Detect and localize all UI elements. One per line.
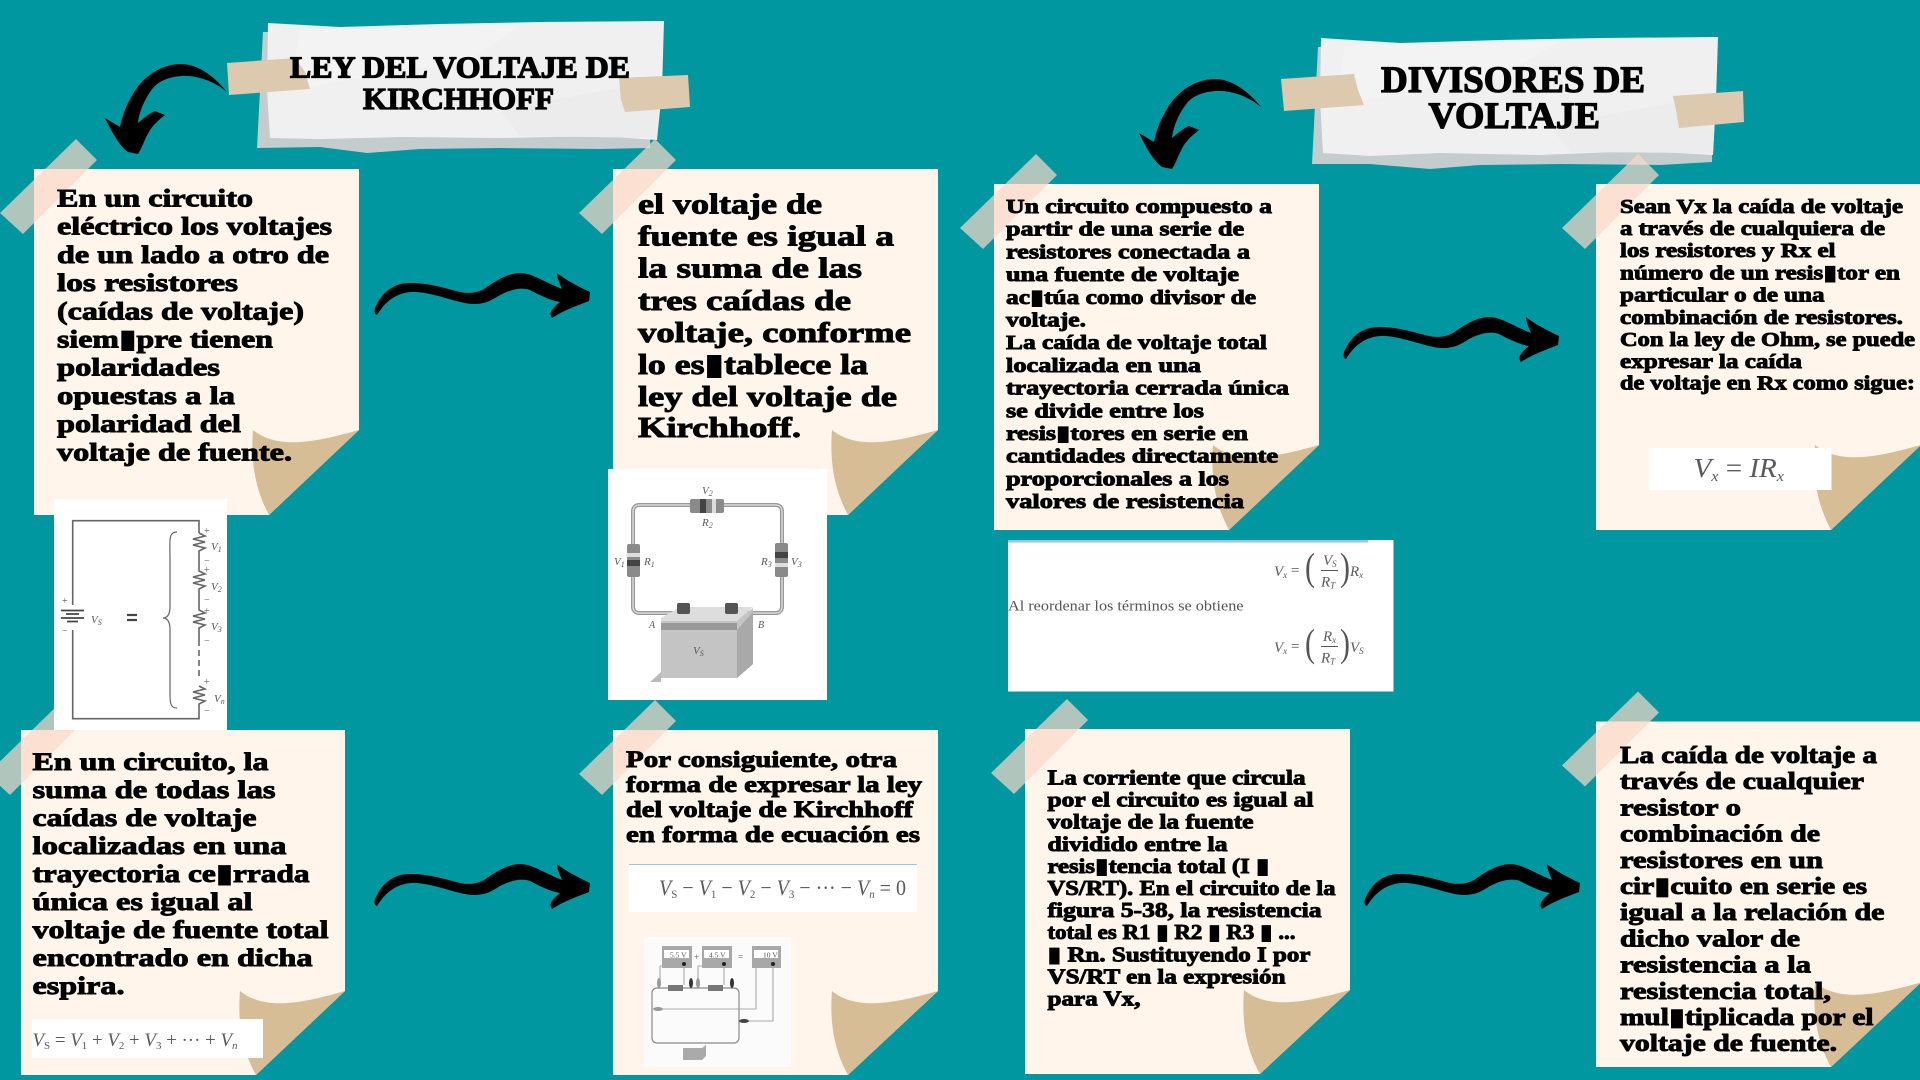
panel: note 4: número de un resis▮tor en (1620, 262, 1901, 284)
formula: Vx from VS over RT times Rx: S (1332, 559, 1337, 569)
image: series circuit schematic: 3 (217, 625, 222, 634)
image: circuit with battery and resistors: 3 (797, 560, 802, 569)
panel: note 5: V (107, 1030, 119, 1051)
formula: Vx from VS over RT times Rx: x (1282, 570, 1287, 580)
image: series circuit schematic: V (214, 693, 221, 705)
panel: note 3: ac▮túa como divisor de (1006, 287, 1256, 309)
panel: note 7: resis▮tencia total (I ▮ (1048, 854, 1270, 878)
panel: note 4: x (1710, 469, 1719, 485)
image: series circuit schematic: + (62, 596, 68, 607)
panel: note 3: partir de una serie de (1006, 219, 1244, 241)
panel: note 1: voltaje de fuente. (57, 437, 292, 466)
panel: note 3 (960, 154, 1319, 530)
image: series circuit schematic: − (204, 556, 210, 567)
panel: note 6: S (671, 887, 677, 901)
image: circuit with battery and resistors: R (702, 517, 709, 529)
formula: Vx from VS over RT times Rx: V (1274, 564, 1283, 580)
image: meters measuring series circuit (644, 937, 791, 1067)
panel: note 8: través de cualquier (1620, 769, 1864, 795)
panel: note 2: Kirchhoff. (638, 412, 801, 444)
panel: note 4: particular o de una (1620, 285, 1824, 307)
panel: note 4: = (1718, 453, 1749, 483)
panel: note 6: n (869, 887, 875, 901)
panel: note 7: ▮ Rn. Sustituyendo I por (1048, 942, 1310, 966)
panel: note 2: fuente es igual a (638, 221, 895, 253)
image: circuit with battery and resistors: 2 (709, 489, 713, 498)
image: meters measuring series circuit: 5.5 V (670, 950, 687, 960)
panel: note 6 (579, 700, 938, 1075)
panel: note 5: suma de todas las (32, 775, 276, 804)
panel: note 7: total es R1 ▮ R2 ▮ R3 ▮ ... (1048, 920, 1296, 944)
panel: note 5: En un circuito, la (32, 747, 269, 776)
image: circuit with battery and resistors: V (614, 556, 621, 568)
arrow: from title 2 to first note (1139, 79, 1261, 169)
panel: note 4: los resistores y Rx el (1620, 240, 1836, 262)
panel: note 2 (579, 139, 938, 515)
panel: note 1: (caídas de voltaje) (57, 296, 304, 325)
panel: note 6: V (738, 875, 751, 900)
image: meters measuring series circuit: = (738, 952, 743, 962)
panel: note 7: dividido entre la (1048, 832, 1228, 856)
panel: note 5: n (232, 1040, 238, 1052)
panel: note 4: de voltaje en Rx como sigue: (1620, 372, 1915, 394)
panel: note 4: combinación de resistores. (1620, 307, 1903, 329)
panel: note 7: voltaje de la fuente (1048, 810, 1254, 834)
panel: note 8: combinación de (1620, 822, 1820, 848)
panel: note 7: La corriente que circula (1048, 766, 1306, 790)
image: series circuit schematic: S (98, 618, 102, 627)
panel: note 4: expresar la caída (1620, 351, 1802, 373)
image: series circuit schematic: 1 (218, 545, 222, 554)
panel: note 6: 2 (750, 887, 755, 901)
arrow: note 3 to note 4 (1344, 317, 1559, 362)
panel: note 2: el voltaje de (638, 188, 822, 220)
arrow: from title 1 to first note (105, 64, 227, 154)
panel: note 6: 3 (789, 887, 794, 901)
panel: note 5: trayectoria ce▮rrada (32, 859, 310, 888)
panel: note 2: la suma de las (638, 253, 862, 285)
panel: note 8: dicho valor de (1620, 926, 1800, 952)
image: series circuit schematic: − (204, 706, 210, 717)
panel: note 5: caídas de voltaje (32, 803, 256, 832)
image: series circuit schematic: + (204, 526, 210, 537)
formula: Vx from Rx over RT times VS: x (1282, 646, 1287, 656)
panel: note 5: S (44, 1040, 50, 1052)
panel: note 5: = (50, 1030, 70, 1051)
panel: note 5 (0, 700, 345, 1075)
panel: note 4: Con la ley de Ohm, se puede (1620, 329, 1915, 351)
panel: note 3: La caída de voltaje total (1006, 332, 1267, 354)
formula: Vx from Rx over RT times VS: S (1359, 646, 1364, 656)
image: series circuit schematic: + (204, 677, 210, 688)
panel: note 6: forma de expresar la ley (626, 772, 922, 798)
image: circuit with battery and resistors: R (644, 556, 651, 568)
panel: note 6: − (755, 875, 777, 900)
image: circuit with battery and resistors: S (700, 649, 704, 658)
panel: note 2: voltaje, conforme (638, 317, 911, 349)
panel: note 3: una fuente de voltaje (1006, 264, 1239, 286)
panel: note 4: IR (1749, 453, 1775, 483)
panel: note 3: resistores conectada a (1006, 241, 1250, 263)
panel: note 5: + (124, 1030, 144, 1051)
panel: note 5: V (70, 1030, 82, 1051)
panel: note 4: Sean Vx la caída de voltaje (1620, 196, 1903, 218)
panel: note 2: tres caídas de (638, 285, 851, 317)
image: series circuit schematic: + (204, 565, 210, 576)
panel: note 6: del voltaje de Kirchhoff (626, 797, 914, 823)
panel: note 3: Un circuito compuesto a (1006, 196, 1272, 218)
panel: note 4: x (1776, 469, 1784, 485)
formula: Vx from Rx over RT times VS: T (1330, 656, 1336, 666)
image: series circuit schematic: + (204, 606, 210, 617)
image: circuit with battery and resistors: 2 (709, 521, 713, 530)
panel: note 6: − (716, 875, 738, 900)
panel: note 2: lo es▮tablece la (638, 349, 869, 381)
image: circuit with battery and resistors: V (693, 645, 700, 657)
panel: note 6: = 0 (875, 875, 906, 900)
panel: note 4: V (1694, 453, 1710, 483)
title note: Divisores de voltaje: VOLTAJE (1428, 96, 1600, 137)
image: series circuit schematic: 2 (218, 585, 222, 594)
panel: note 1: En un circuito (57, 184, 253, 212)
title note: Ley del voltaje de Kirchhoff (227, 21, 690, 153)
formula: Vx from Rx over RT times VS: ( (1305, 622, 1315, 665)
image: voltage divider formulas (1008, 540, 1394, 692)
panel: note 5: + (87, 1030, 107, 1051)
formula: Vx from Rx over RT times VS: R (1323, 629, 1332, 645)
panel: note 3: voltaje. (1006, 310, 1086, 332)
panel: note 5: + ··· + (161, 1030, 220, 1051)
panel: note 1 (0, 139, 359, 515)
panel: note 3: valores de resistencia (1006, 491, 1244, 513)
panel: note 5: 1 (82, 1040, 87, 1052)
panel: note 8: resistores en un (1620, 848, 1823, 874)
image: circuit with battery and resistors: B (758, 620, 764, 631)
panel: note 8 (1562, 692, 1920, 1067)
formula: Vx from VS over RT times Rx: V (1323, 553, 1332, 569)
panel: note 1: los resistores (57, 268, 238, 297)
panel: note 7: VS/RT en la expresión (1048, 964, 1286, 988)
formula: Vx from Rx over RT times VS: V (1350, 640, 1359, 656)
image: circuit with battery and resistors: V (702, 485, 709, 497)
image: meters measuring series circuit: 4.5 V (709, 950, 726, 960)
formula: Vx from Rx over RT times VS: x (1331, 635, 1336, 645)
image: series circuit schematic: V (91, 614, 98, 626)
panel: note 6: V (699, 875, 712, 900)
image: series circuit schematic: − (204, 595, 210, 606)
panel: note 8: mul▮tiplicada por el (1620, 1005, 1874, 1031)
panel: note 5: 3 (156, 1040, 162, 1052)
panel: note 1: polaridades (57, 353, 220, 382)
title note: Ley del voltaje de Kirchhoff: KIRCHHOFF (363, 81, 554, 116)
panel: note 6: V (777, 875, 790, 900)
image: series circuit schematic: − (204, 636, 210, 647)
panel: note 3: cantidades directamente (1006, 446, 1278, 468)
panel: note 7 (991, 699, 1350, 1074)
arrow: note 5 to note 6 (375, 864, 590, 909)
image: series circuit schematic: V (211, 621, 218, 633)
image: series circuit schematic: n (221, 697, 225, 706)
panel: note 6: V (659, 875, 672, 900)
panel: note 1: eléctrico los voltajes (57, 212, 332, 241)
image: series circuit schematic: − (62, 626, 68, 637)
image: series circuit schematic: V (211, 581, 218, 593)
panel: note 6: Por consiguiente, otra (626, 747, 897, 773)
formula: Vx from VS over RT times Rx: = (1291, 563, 1299, 579)
panel: note 2: ley del voltaje de (638, 381, 897, 413)
panel: note 6: 1 (711, 887, 716, 901)
panel: note 5: V (32, 1030, 44, 1051)
formula: Vx from VS over RT times Rx (1274, 546, 1363, 590)
panel: note 7: para Vx, (1048, 986, 1140, 1010)
panel: note 1: opuestas a la (57, 381, 235, 410)
panel: note 6: − (677, 875, 699, 900)
panel: note 5: única es igual al (32, 887, 252, 916)
panel: note 8: voltaje de fuente. (1620, 1031, 1837, 1057)
panel: note 3: trayectoria cerrada única (1006, 378, 1289, 400)
image: circuit with battery and resistors: A (648, 620, 656, 631)
image: circuit with battery and resistors (608, 469, 827, 700)
panel: note 3: resis▮tores en serie en (1006, 423, 1249, 445)
panel: note 5: encontrado en dicha (32, 943, 313, 972)
arrow: note 1 to note 2 (375, 273, 590, 318)
panel: note 1: de un lado a otro de (57, 240, 329, 269)
panel: note 8: resistor o (1620, 795, 1741, 821)
panel: note 4 (1562, 154, 1920, 530)
panel: note 5: V (220, 1030, 232, 1051)
image: circuit with battery and resistors: 3 (767, 560, 772, 569)
formula: Vx from VS over RT times Rx: R (1350, 564, 1359, 580)
panel: note 3: se divide entre los (1006, 400, 1204, 422)
formula: Vx from Rx over RT times VS: = (1291, 639, 1299, 655)
panel: note 5: localizadas en una (32, 831, 287, 860)
panel: note 1: siem▮pre tienen (57, 324, 273, 354)
image: circuit with battery and resistors: 1 (621, 560, 625, 569)
panel: note 8: resistencia a la (1620, 953, 1811, 979)
formula: Vx from Rx over RT times VS (1274, 622, 1364, 666)
image: meters measuring series circuit: 10 V (763, 950, 778, 960)
title note: Ley del voltaje de Kirchhoff: LEY DEL VOLTAJE DE (290, 50, 630, 84)
panel: note 8: resistencia total, (1620, 979, 1831, 1005)
panel: note 8: igual a la relación de (1620, 900, 1885, 926)
panel: note 8: La caída de voltaje a (1620, 743, 1877, 769)
image: circuit with battery and resistors: V (791, 556, 798, 568)
title note: Divisores de voltaje (1281, 37, 1744, 169)
panel: note 5: espira. (32, 971, 124, 1000)
panel: note 5: voltaje de fuente total (32, 915, 328, 944)
formula: Vx from VS over RT times Rx: R (1321, 574, 1330, 590)
formula: Vx from VS over RT times Rx: x (1358, 570, 1363, 580)
image: meters measuring series circuit: + (694, 952, 699, 962)
formula: Vx from VS over RT times Rx: ( (1305, 546, 1315, 589)
formula: Vx from Rx over RT times VS: V (1274, 640, 1283, 656)
formula: Vx from VS over RT times Rx: ) (1340, 546, 1350, 589)
panel: note 3: localizada en una (1006, 355, 1201, 377)
panel: note 5: V (144, 1030, 156, 1051)
image: circuit with battery and resistors: R (761, 556, 768, 568)
panel: note 4: a través de cualquiera de (1620, 218, 1885, 240)
panel: note 7: figura 5-38, la resistencia (1048, 898, 1322, 922)
formula: Vx from VS over RT times Rx: T (1330, 580, 1336, 590)
panel: note 6: V (857, 875, 870, 900)
panel: note 7: VS/RT). En el circuito de la (1048, 876, 1336, 900)
image: series circuit schematic (54, 499, 227, 730)
panel: note 7: por el circuito es igual al (1048, 788, 1314, 812)
formula: Vx from Rx over RT times VS: R (1321, 650, 1330, 666)
image: series circuit schematic: V (211, 541, 218, 553)
panel: note 3: proporcionales a los (1006, 468, 1229, 490)
panel: note 6: − ··· − (794, 875, 857, 900)
panel: note 6: en forma de ecuación es (626, 822, 920, 848)
panel: note 8: cir▮cuito en serie es (1620, 874, 1867, 900)
formula: Vx from Rx over RT times VS: ) (1340, 622, 1350, 665)
image: circuit with battery and resistors: 1 (651, 560, 655, 569)
text: reorder note: Al reordenar los términos se obtiene (1008, 599, 1244, 615)
panel: note 5: 2 (119, 1040, 124, 1052)
title note: Divisores de voltaje: DIVISORES DE (1381, 60, 1645, 101)
arrow: note 7 to note 8 (1365, 864, 1580, 909)
panel: note 1: polaridad del (57, 409, 241, 438)
